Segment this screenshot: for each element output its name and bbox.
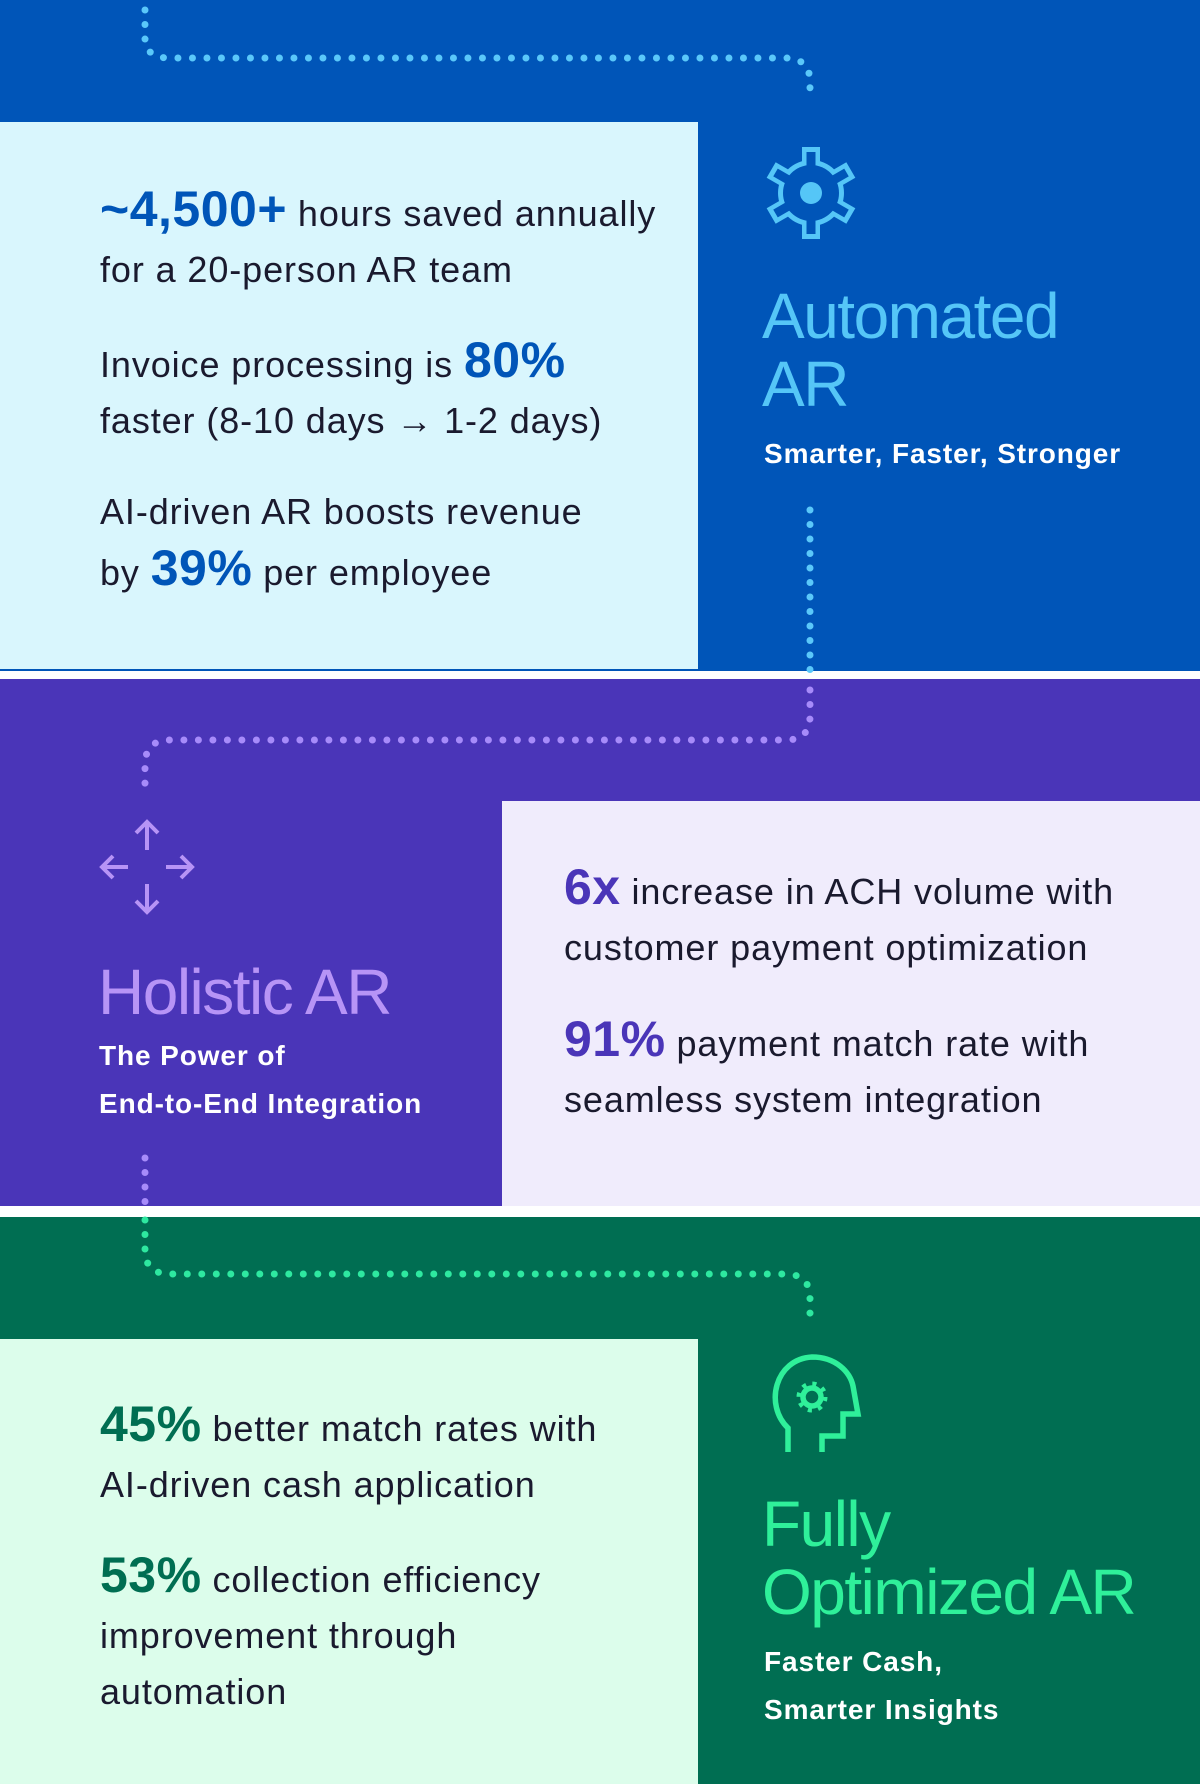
heading: Automated AR bbox=[762, 280, 1058, 420]
panel: optimized AR stats bbox=[0, 1339, 698, 1784]
subtitle: The Power of End-to-End Integration bbox=[99, 1040, 422, 1119]
section: optimized AR background bbox=[0, 1217, 1200, 1784]
stat: collection efficiency: automation bbox=[100, 1671, 287, 1712]
subtitle: Faster Cash, Smarter Insights: Faster Cash, bbox=[764, 1646, 943, 1677]
subtitle: Faster Cash, Smarter Insights bbox=[764, 1646, 999, 1725]
stat: invoice processing: faster (8-10 days → 1-2 days) bbox=[100, 400, 602, 441]
stat: hours saved: for a 20-person AR team bbox=[100, 249, 513, 290]
stat: revenue: AI-driven AR boosts revenue bbox=[100, 491, 583, 532]
stat: revenue bbox=[100, 491, 583, 596]
stat: invoice processing bbox=[100, 332, 602, 441]
stat: match rates bbox=[100, 1396, 597, 1505]
subtitle: Faster Cash, Smarter Insights: Smarter Insights bbox=[764, 1694, 999, 1725]
stat: match rate: seamless system integration bbox=[564, 1079, 1042, 1120]
stat: match rate: 91% payment match rate with bbox=[564, 1011, 1089, 1067]
subtitle: The Power of End-to-End Integration: End-to-End Integration bbox=[99, 1088, 422, 1119]
stat: revenue: by 39% per employee bbox=[100, 540, 492, 596]
icon: arrows bbox=[99, 819, 195, 915]
icon: gear bbox=[766, 147, 856, 239]
subtitle: Smarter, Faster, Stronger: Smarter, Faster, Stronger bbox=[764, 438, 1121, 469]
stat: collection efficiency: improvement through bbox=[100, 1615, 457, 1656]
heading: Holistic AR: Holistic AR bbox=[98, 956, 391, 1028]
stat: collection efficiency bbox=[100, 1547, 541, 1712]
stat: collection efficiency: 53% collection efficiency bbox=[100, 1547, 541, 1603]
section: automated AR background bbox=[0, 0, 1200, 671]
icon: head with gear bbox=[772, 1354, 862, 1452]
stat: ACH volume bbox=[564, 859, 1114, 968]
stat: hours saved: ~4,500+ hours saved annually bbox=[100, 181, 656, 237]
stat: ACH volume: 6x increase in ACH volume with bbox=[564, 859, 1114, 915]
heading: Automated AR: AR bbox=[762, 348, 848, 420]
stat: invoice processing: Invoice processing is 80% bbox=[100, 332, 566, 388]
stat: match rates: 45% better match rates with bbox=[100, 1396, 597, 1452]
stat: match rates: AI-driven cash application bbox=[100, 1464, 536, 1505]
subtitle: The Power of End-to-End Integration: The Power of bbox=[99, 1040, 286, 1071]
panel: holistic AR stats bbox=[502, 801, 1200, 1206]
heading: Fully Optimized AR: Fully bbox=[762, 1488, 890, 1560]
heading: Automated AR: Automated bbox=[762, 280, 1058, 352]
stat: match rate bbox=[564, 1011, 1089, 1120]
stat: ACH volume: customer payment optimization bbox=[564, 927, 1088, 968]
heading: Fully Optimized AR: Optimized AR bbox=[762, 1556, 1135, 1628]
stat: hours saved bbox=[100, 181, 656, 290]
section: holistic AR background bbox=[0, 679, 1200, 1206]
panel: automated AR stats bbox=[0, 122, 698, 669]
heading: Fully Optimized AR bbox=[762, 1488, 1135, 1628]
